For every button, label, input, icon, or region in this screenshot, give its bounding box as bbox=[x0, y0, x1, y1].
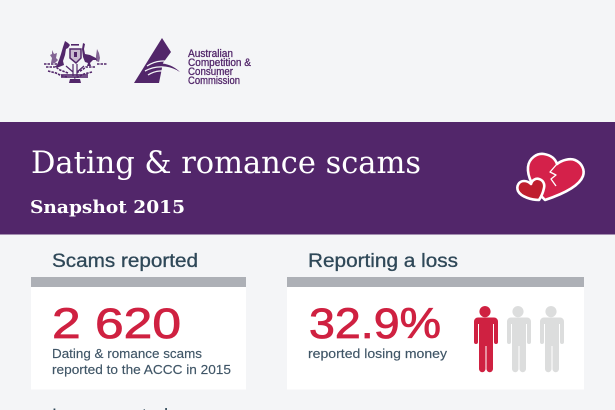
subtitle: Snapshot 2015 bbox=[30, 197, 185, 218]
panel: title banner bbox=[0, 122, 615, 234]
icon: Australian coat of arms crest bbox=[44, 41, 107, 83]
number: scams reported: 2 620 bbox=[52, 300, 181, 348]
text: scams description bbox=[52, 346, 231, 377]
number: percent reporting loss: 32.9% bbox=[309, 300, 441, 348]
panel: scams reported card bbox=[31, 277, 246, 390]
text: ACCC name: Competition & bbox=[188, 57, 252, 69]
heading: reporting a loss: Reporting a loss bbox=[308, 251, 458, 272]
icon: broken hearts bbox=[517, 154, 584, 200]
text: ACCC name: Commission bbox=[188, 75, 240, 87]
text: scams description: reported to the ACCC in 2015 bbox=[52, 362, 231, 377]
icon: person grey bbox=[540, 306, 564, 372]
text: ACCC name: Consumer bbox=[188, 66, 233, 78]
text: loss description: reported losing money bbox=[308, 346, 448, 361]
heading: scams reported: Scams reported bbox=[52, 251, 198, 272]
text: scams description: Dating & romance scams bbox=[52, 346, 203, 361]
icon: person grey bbox=[507, 306, 531, 372]
text: ACCC name: Australian bbox=[188, 48, 233, 60]
panel: reporting a loss card bbox=[287, 277, 584, 390]
icon: ACCC triangle logo bbox=[134, 38, 180, 83]
title: Dating & romance scams bbox=[31, 145, 421, 181]
text: ACCC name bbox=[188, 48, 252, 87]
icon: person red bbox=[474, 306, 498, 372]
